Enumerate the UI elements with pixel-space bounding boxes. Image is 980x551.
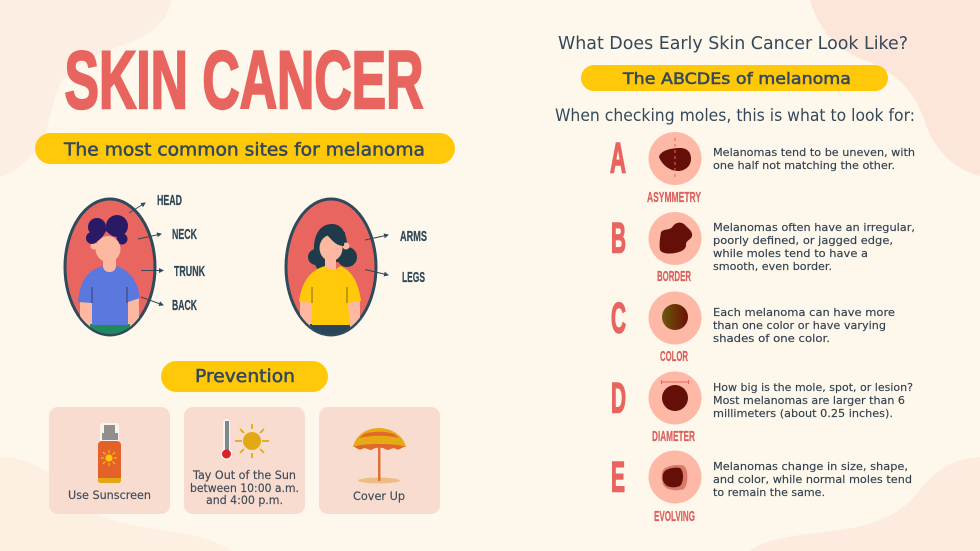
row E: evolving: to remain the same.	[713, 486, 825, 499]
label: back: BACK	[172, 297, 197, 314]
row C: color: than one color or have varying	[713, 319, 886, 332]
heading: prevention	[161, 361, 328, 392]
title: SKIN CANCER	[64, 35, 424, 126]
heading: prevention: Prevention	[195, 366, 295, 387]
row B: border: while moles tend to have a	[713, 247, 868, 260]
label: trunk: TRUNK	[174, 263, 205, 280]
icon: thermometer and sun	[220, 419, 269, 460]
label: neck: NECK	[172, 226, 197, 243]
body part arrows	[129, 203, 388, 305]
row E: evolving: EVOLVING	[654, 508, 695, 525]
label: head: HEAD	[157, 192, 182, 209]
icon: sunscreen bottle	[98, 423, 121, 483]
row E: evolving: Melanomas change in size, shape,	[713, 460, 908, 473]
card: stay out of the sun: Tay Out of the Sun	[192, 469, 296, 482]
card: stay out of the sun	[184, 407, 305, 514]
card: cover up: Cover Up	[353, 490, 405, 503]
row B: border: smooth, even border.	[713, 260, 832, 273]
icon: mole with diameter bar	[648, 372, 702, 424]
row A: asymmetry: one half not matching the other.	[713, 159, 895, 172]
row C: color: shades of one color.	[713, 332, 830, 345]
row C: color: COLOR	[660, 348, 688, 365]
row B: border: B	[611, 214, 626, 262]
card: cover up	[319, 407, 440, 514]
card: use sunscreen: Use Sunscreen	[68, 489, 151, 502]
row A: asymmetry: ASYMMETRY	[647, 189, 701, 206]
row B: border: BORDER	[657, 268, 691, 285]
row D: diameter: DIAMETER	[652, 428, 695, 445]
figure: man in oval	[65, 199, 155, 338]
row D: diameter	[611, 372, 913, 445]
card: stay out of the sun: between 10:00 a.m.	[190, 482, 299, 495]
row D: diameter: Most melanomas are larger than 6	[713, 394, 905, 407]
label: arms: ARMS	[400, 228, 427, 245]
icon: asymmetric mole	[648, 132, 702, 185]
row C: color: C	[611, 294, 626, 342]
row E: evolving: and color, while normal moles tend	[713, 473, 912, 486]
icon: beach umbrella	[353, 428, 406, 484]
row D: diameter: millimeters (about 0.25 inches).	[713, 407, 893, 420]
row B: border: Melanomas often have an irregular,	[713, 221, 915, 234]
row D: diameter: How big is the mole, spot, or lesion?	[713, 381, 913, 394]
icon: two-colour mole	[648, 292, 702, 344]
row C: color	[611, 292, 895, 365]
row B: border: poorly defined, or jagged edge,	[713, 234, 893, 247]
icon: irregular border mole	[648, 212, 702, 265]
icon: evolving mole	[648, 450, 702, 504]
row A: asymmetry	[610, 132, 915, 206]
row E: evolving	[611, 450, 912, 525]
heading: abcdes of melanoma	[581, 65, 888, 91]
heading: most common sites	[35, 133, 455, 164]
row A: asymmetry: Melanomas tend to be uneven, with	[713, 146, 915, 159]
heading: most common sites: The most common sites for melanoma	[63, 140, 425, 160]
label: legs: LEGS	[402, 269, 425, 286]
row A: asymmetry: A	[610, 134, 626, 182]
intro text: When checking moles, this is what to look for:	[555, 106, 915, 126]
figure: woman in oval	[286, 199, 376, 338]
heading: what does early skin cancer look like: What Does Early Skin Cancer Look Like?	[558, 34, 908, 54]
row D: diameter: D	[611, 374, 626, 422]
card: use sunscreen	[49, 407, 170, 514]
heading: abcdes of melanoma: The ABCDEs of melanoma	[622, 69, 851, 88]
row E: evolving: E	[611, 454, 625, 502]
row B: border	[611, 212, 915, 285]
card: stay out of the sun: and 4:00 p.m.	[206, 494, 283, 507]
row C: color: Each melanoma can have more	[713, 306, 895, 319]
